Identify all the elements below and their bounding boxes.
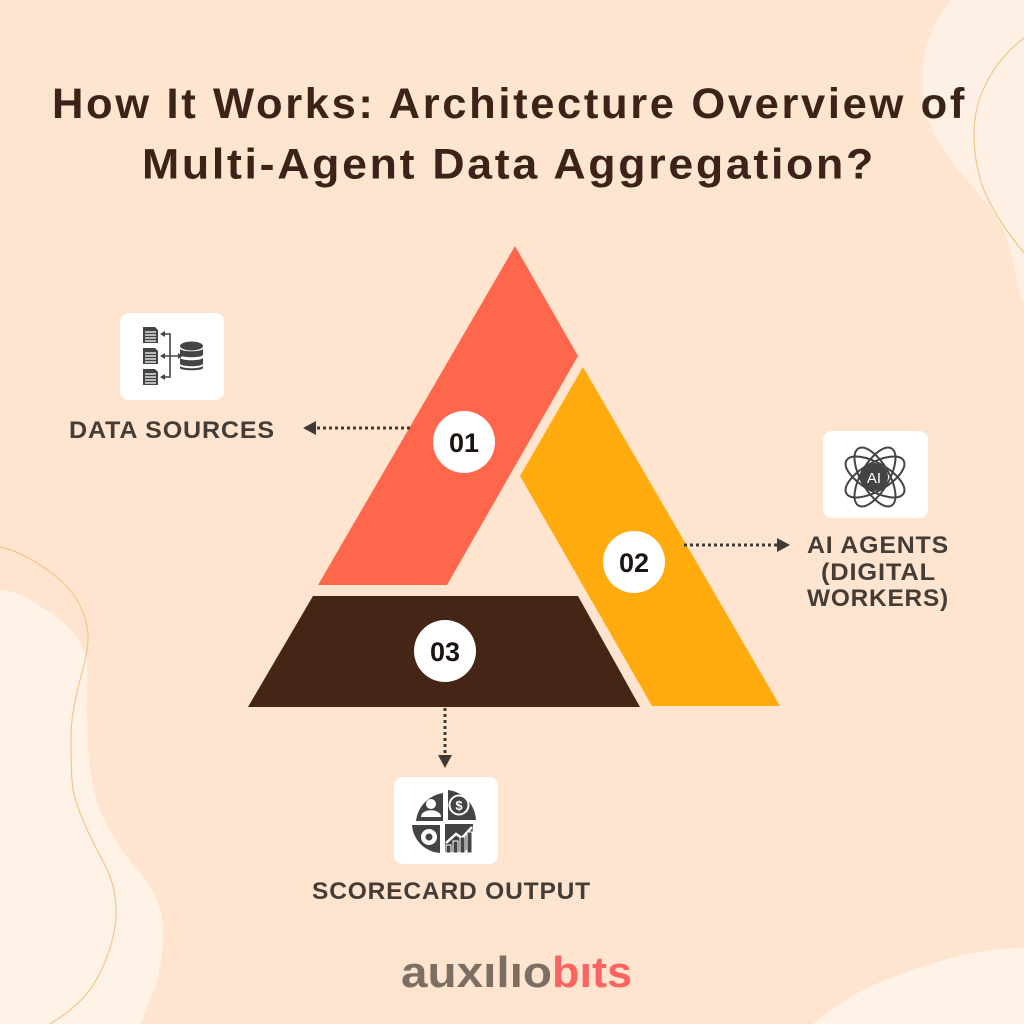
panel: triangle segment 03 <box>248 596 640 707</box>
label: AI agents <box>807 532 949 612</box>
arrow: 02 to AI agents <box>684 538 790 552</box>
logo <box>401 948 632 997</box>
arrow: 01 to data sources <box>303 421 410 435</box>
icon: scorecard <box>394 777 498 864</box>
title <box>52 80 967 188</box>
panel: triangle segment 02: 02 <box>619 548 649 578</box>
label: AI agents: (DIGITAL <box>821 559 936 586</box>
label: data sources: DATA SOURCES <box>69 417 275 444</box>
panel: triangle segment 01 <box>318 246 578 585</box>
label: AI agents: WORKERS) <box>807 585 949 612</box>
title: Multi-Agent Data Aggregation? <box>142 140 876 188</box>
icon: AI agents <box>823 431 928 518</box>
panel: triangle segment 01: 01 <box>449 428 479 458</box>
panel: triangle segment 03: 03 <box>430 637 460 667</box>
icon: data sources <box>120 313 224 400</box>
panel: triangle segment 02 <box>520 367 780 706</box>
label: AI agents: AI AGENTS <box>807 532 949 559</box>
arrow: 03 to scorecard <box>438 708 452 768</box>
title: How It Works: Architecture Overview of <box>52 80 967 128</box>
logo: bıts <box>552 948 632 997</box>
icon: AI agents: AI <box>867 470 881 487</box>
logo: auxılıo <box>401 948 552 997</box>
label: scorecard output: SCORECARD OUTPUT <box>312 878 591 905</box>
icon: scorecard: $ <box>455 798 463 813</box>
